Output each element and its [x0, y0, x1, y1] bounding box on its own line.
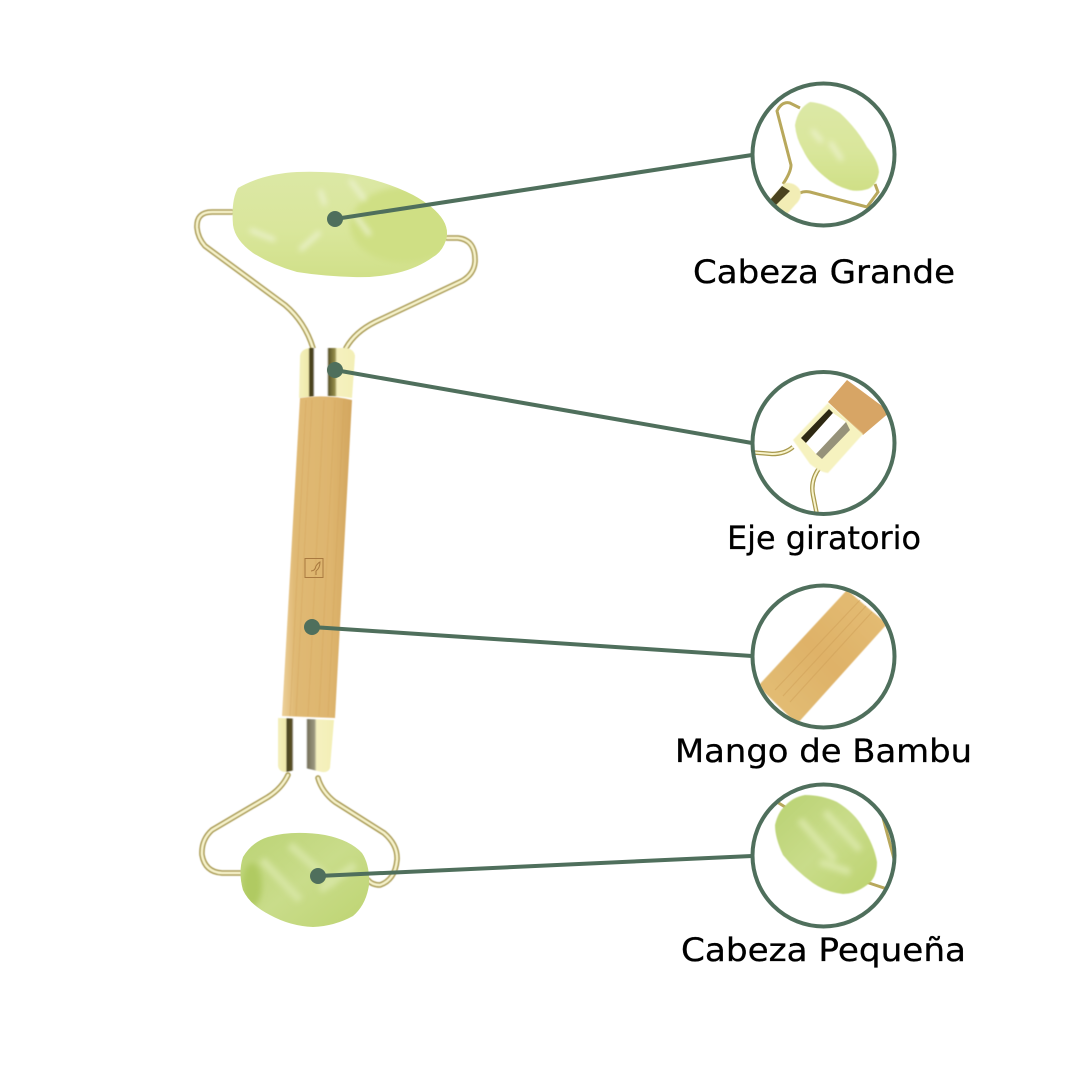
- bottom metal frame: [202, 775, 397, 885]
- detail label: cabeza pequena: Cabeza Pequeña: [681, 931, 966, 969]
- detail label: mango de bambu: Mango de Bambu: [675, 732, 972, 770]
- detail label: eje giratorio: Eje giratorio: [727, 519, 921, 557]
- detail label: cabeza grande: Cabeza Grande: [693, 253, 955, 291]
- top metal frame: [197, 212, 475, 348]
- connector: cabeza pequena: [310, 856, 752, 884]
- detail circle: cabeza pequena: [752, 784, 897, 926]
- connector: eje giratorio: [327, 362, 752, 443]
- connector: mango de bambu: [304, 619, 752, 656]
- large jade stone: [232, 172, 447, 278]
- detail circle: eje giratorio: [748, 372, 894, 515]
- detail circle: mango de bambu: [752, 586, 894, 728]
- handle logo mark: [305, 558, 323, 578]
- bamboo handle: [282, 396, 352, 718]
- top metal collar: [299, 348, 355, 398]
- jade roller product: [197, 165, 475, 935]
- detail circle: cabeza grande: [752, 84, 894, 228]
- connector: cabeza grande: [327, 155, 752, 227]
- small jade stone: [240, 832, 370, 927]
- bottom metal collar: [278, 718, 334, 772]
